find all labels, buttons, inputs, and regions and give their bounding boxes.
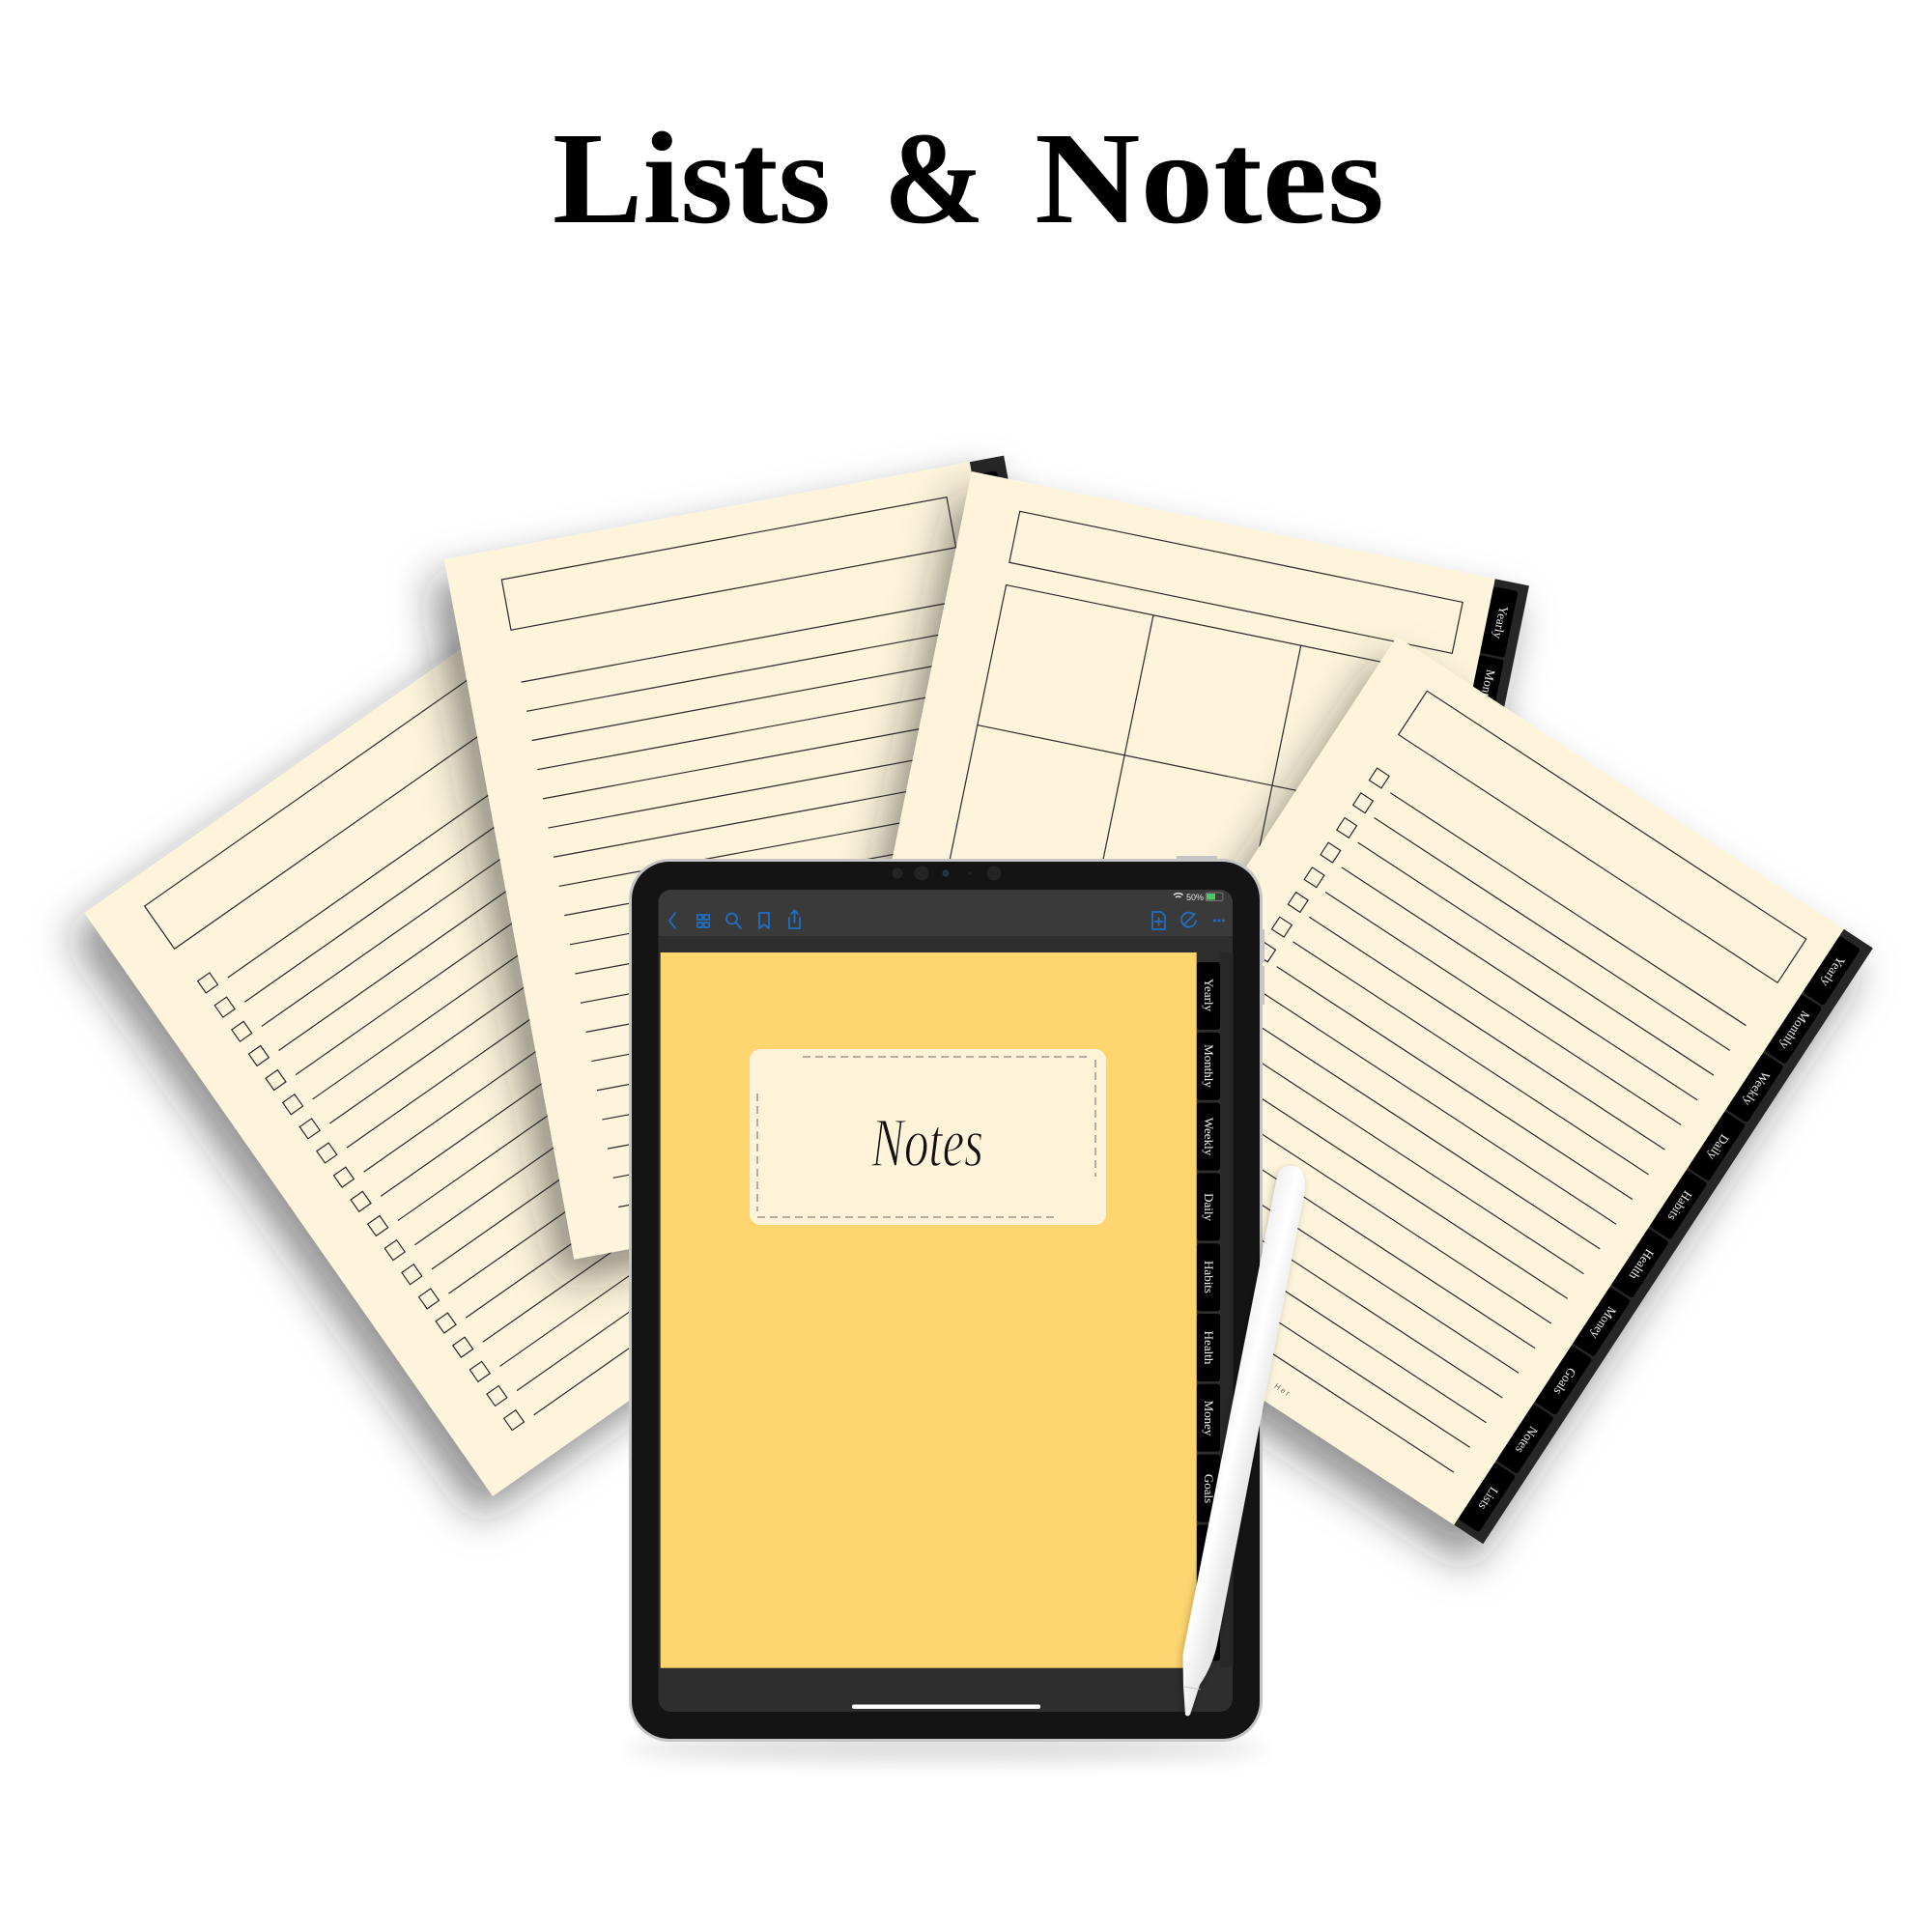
pen tip seam <box>1184 1687 1201 1690</box>
camera sensors <box>893 866 1001 881</box>
icon: battery <box>1206 893 1223 900</box>
title box <box>1009 511 1463 653</box>
icon: search <box>726 914 741 928</box>
title: & <box>884 106 984 251</box>
page sheet <box>84 607 930 1496</box>
card script text: Notes <box>870 1104 983 1181</box>
checkboxes <box>198 973 524 1431</box>
tablet frame <box>629 859 1263 1742</box>
side buttons <box>1177 856 1264 1005</box>
stylus pen <box>1182 1166 1305 1716</box>
title: Lists <box>553 106 831 251</box>
tab labels <box>1476 954 1848 1513</box>
tab labels: Notes <box>1513 1424 1541 1456</box>
ruled list lines <box>1098 793 1747 1472</box>
tab labels: Daily <box>1202 1193 1216 1221</box>
page sheet <box>444 462 1099 1260</box>
tab labels: Money <box>1202 1401 1216 1436</box>
tab labels: Monthly <box>1202 1044 1216 1088</box>
tab labels: Habits <box>1202 1261 1216 1293</box>
status bar <box>1174 893 1223 902</box>
checkboxes <box>1077 768 1389 1235</box>
tab labels: Weekly <box>1740 1069 1774 1109</box>
tab strip <box>970 456 1133 1162</box>
note label card <box>750 1049 1106 1225</box>
tab labels: Goals <box>1551 1365 1579 1398</box>
page sheet <box>829 471 1495 1276</box>
tablet <box>627 856 1264 1760</box>
tab labels: Lists <box>1476 1485 1501 1513</box>
section tabs <box>1197 962 1220 1661</box>
tab strip <box>1352 579 1529 1283</box>
stitched border <box>757 1057 1095 1217</box>
tab label: monthly: Monthly <box>1475 668 1498 714</box>
tab labels: Health <box>1626 1246 1657 1283</box>
tab strip <box>1454 929 1873 1544</box>
tab labels: Monthly <box>1776 1009 1813 1053</box>
tab label: yearly: Yearly <box>1491 605 1512 640</box>
title: Notes <box>1035 106 1384 251</box>
ruled lines <box>522 600 1063 1207</box>
tab labels: Health <box>1202 1331 1216 1365</box>
section tabs <box>1458 935 1861 1533</box>
first tab <box>972 470 1008 532</box>
battery text: 50% <box>1186 893 1204 902</box>
tab labels <box>1202 979 1216 1503</box>
title box <box>1399 691 1806 982</box>
note grid <box>892 585 1448 1236</box>
panel: checklist page right <box>1007 637 1873 1544</box>
panel: checklist page left <box>84 607 930 1496</box>
app toolbar <box>659 890 1233 936</box>
tab: yearly <box>1480 586 1519 658</box>
title box <box>501 497 956 630</box>
pen body <box>1182 1166 1305 1716</box>
icon: back <box>669 913 675 928</box>
page sheet <box>1007 637 1844 1524</box>
tab labels: Money <box>1587 1304 1619 1342</box>
tab labels: Goals <box>1202 1474 1216 1503</box>
icon: grid <box>697 915 709 927</box>
tab labels: Yearly <box>1818 954 1848 990</box>
tab labels: Weekly <box>1202 1118 1216 1156</box>
card <box>750 1049 1106 1225</box>
tab labels: Habits <box>1665 1188 1695 1224</box>
title box <box>145 645 547 949</box>
icon: share <box>789 910 800 928</box>
small footer text: Her <box>1273 1381 1293 1399</box>
panel: grid notes page <box>829 471 1529 1283</box>
icon: wifi <box>1174 894 1182 897</box>
panel: lined notes page <box>444 456 1133 1260</box>
tablet shadow <box>627 1737 1264 1760</box>
tab: monthly <box>1465 655 1504 726</box>
tab rail <box>1220 952 1233 1667</box>
icon: markup <box>1181 913 1196 927</box>
icon: bookmark <box>759 913 769 928</box>
icon: more dots <box>1213 920 1225 922</box>
icon: new page <box>1152 912 1165 929</box>
tab labels: Daily <box>1704 1132 1732 1163</box>
toolbar icons left <box>669 910 1196 929</box>
home indicator <box>852 1704 1040 1709</box>
tablet bezel <box>632 862 1260 1739</box>
ruled list lines <box>228 734 882 1415</box>
yellow notes cover <box>661 952 1197 1668</box>
tab labels: Yearly <box>1202 979 1216 1012</box>
screen <box>659 890 1233 1712</box>
